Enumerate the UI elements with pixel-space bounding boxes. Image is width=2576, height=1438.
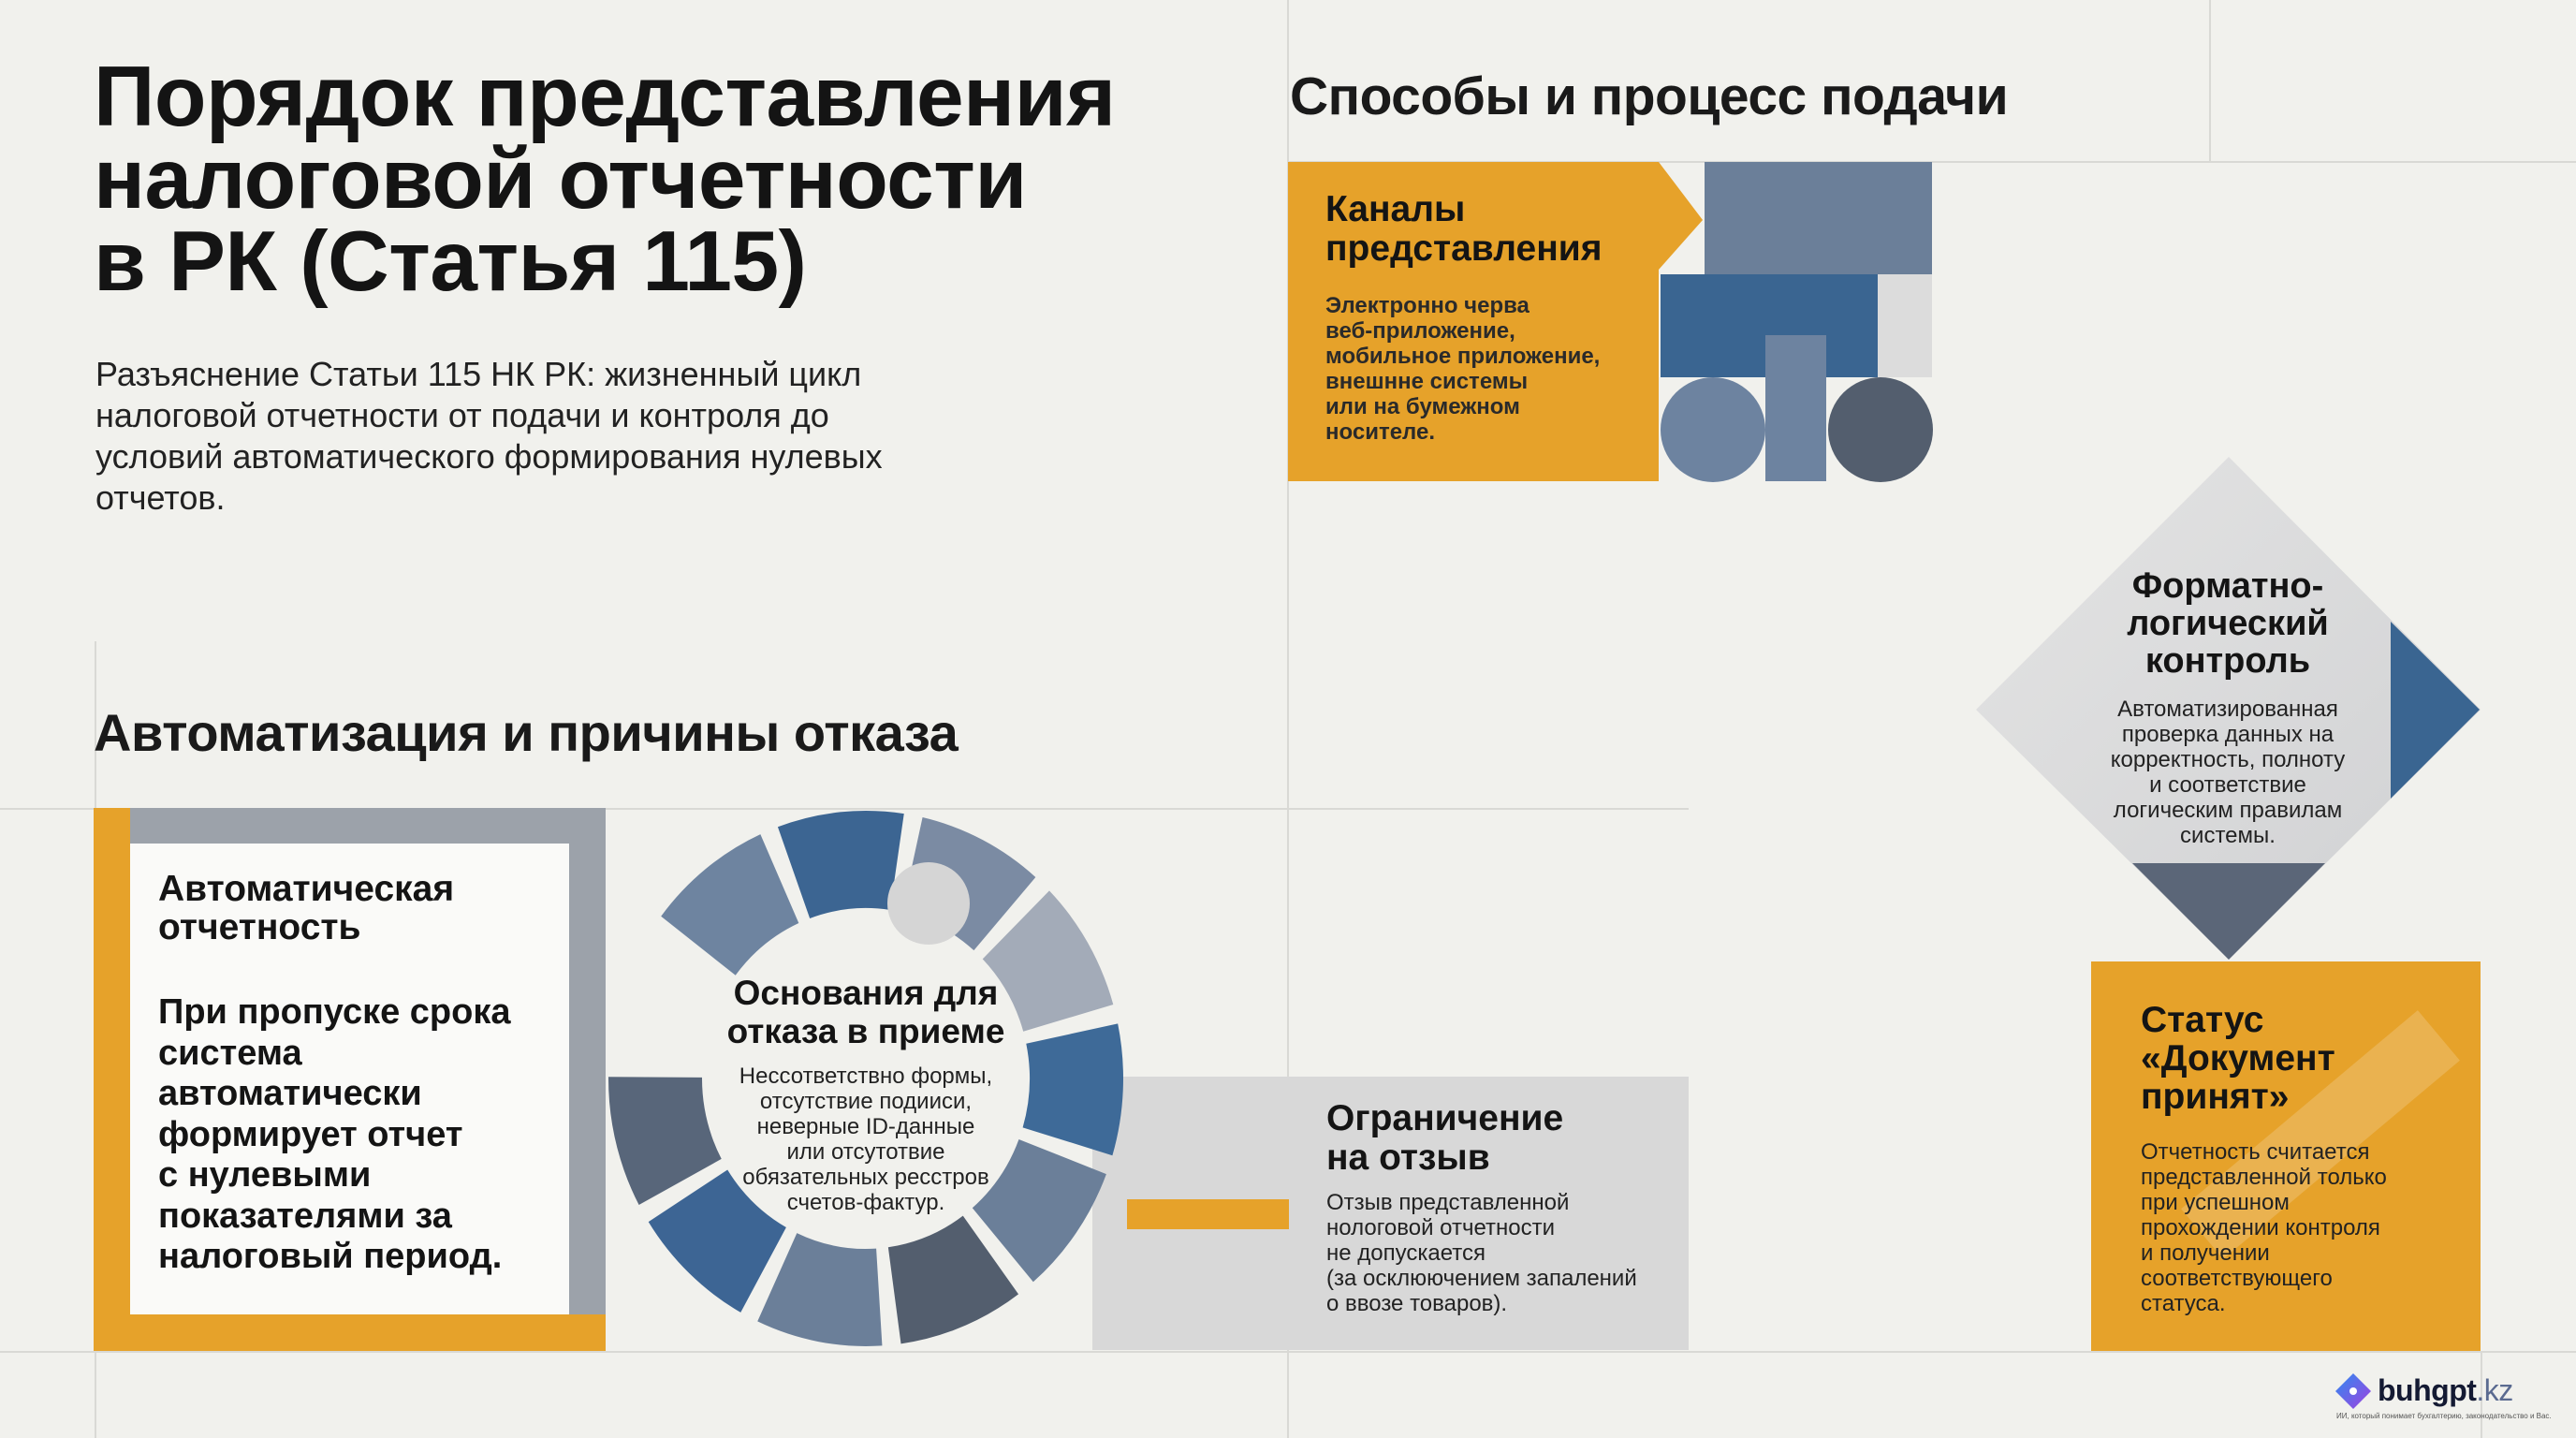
status text: статуса. [2141, 1291, 2226, 1316]
subtitle: условий автоматического формирования нулевых [95, 437, 883, 476]
auto text: автоматически [158, 1074, 422, 1113]
diamond text: Автоматизированная [2117, 697, 2338, 722]
panel: channels [1288, 162, 1933, 482]
title [94, 50, 1116, 309]
chart: rejection wheel [608, 811, 1123, 1346]
auto title [158, 869, 454, 947]
channels text: внешнне системы [1325, 369, 1528, 394]
logo: ИИ, который понимает бухгалтерию, законодательство и Вас. [2336, 1412, 2552, 1420]
auto title: отчетность [158, 907, 361, 947]
status title: принят» [2141, 1077, 2289, 1117]
wheel title: отказа в приеме [727, 1012, 1004, 1050]
auto text: с нулевыми [158, 1155, 371, 1195]
orange bar [1127, 1199, 1289, 1229]
icon: faint check [2181, 1010, 2460, 1259]
icon: logo diamond [2335, 1373, 2371, 1409]
diamond title: логический [2127, 604, 2329, 643]
title: налоговой отчетности [94, 132, 1027, 227]
status text [2141, 1139, 2387, 1316]
channels text: Электронно черва [1325, 293, 1530, 318]
channels text [1325, 293, 1600, 445]
channels text: носителе. [1325, 419, 1435, 445]
restriction text: Отзыв представленной [1326, 1190, 1569, 1215]
heading: automation: Автоматизация и причины отказа [94, 703, 958, 762]
panel: withdrawal restriction [1092, 1077, 1689, 1350]
wheel text: или отсутотвие [786, 1139, 945, 1165]
diamond title: Форматно- [2132, 566, 2323, 606]
restriction text: о ввозе товаров). [1326, 1291, 1507, 1316]
title: Порядок представления [94, 50, 1116, 144]
wheel title [727, 974, 1004, 1050]
status text: соответствующего [2141, 1266, 2333, 1291]
subtitle: Разъяснение Статьи 115 НК РК: жизненный цикл [95, 355, 861, 393]
subtitle: отчетов. [95, 478, 226, 517]
restriction title [1326, 1098, 1563, 1178]
wheel text: Нессответствно формы, [739, 1064, 992, 1089]
restriction text [1326, 1190, 1637, 1316]
panel: automatic reporting [94, 808, 606, 1351]
wheel text [739, 1064, 992, 1215]
status title: Статус [2141, 1000, 2263, 1040]
auto text: система [158, 1034, 302, 1073]
auto text: показателями за [158, 1196, 452, 1236]
restriction title: Ограничение [1326, 1098, 1563, 1138]
panel: format-logical control diamond [1976, 457, 2481, 960]
diamond text: проверка данных на [2122, 722, 2334, 747]
auto text: налоговый период. [158, 1237, 502, 1276]
diamond text [2111, 697, 2346, 848]
auto text: При пропуске срока [158, 992, 511, 1032]
status text: прохождении контроля [2141, 1215, 2380, 1240]
channels text: мобильное приложение, [1325, 344, 1600, 369]
channels title [1325, 189, 1603, 269]
channels title: Каналы [1325, 189, 1465, 229]
auto text: формирует отчет [158, 1114, 462, 1153]
restriction text: нологовой отчетности [1326, 1215, 1555, 1240]
restriction text: не допускается [1326, 1240, 1486, 1266]
channels text: или на бумежном [1325, 394, 1520, 419]
diamond text: логическим правилам [2114, 798, 2342, 823]
title: в РК (Статья 115) [94, 214, 806, 309]
status title [2141, 1000, 2335, 1117]
subtitle [95, 355, 883, 517]
diamond text: и соответствие [2149, 772, 2306, 798]
diamond title: контроль [2145, 641, 2310, 681]
restriction title: на отзыв [1326, 1137, 1490, 1178]
diamond title [2127, 566, 2329, 681]
logo text: buhgpt.kz [2378, 1373, 2513, 1407]
diamond text: корректность, полноту [2111, 747, 2345, 772]
wheel title: Основания для [734, 974, 998, 1012]
status text: и получении [2141, 1240, 2270, 1266]
wheel text: обязательных ресстров [742, 1165, 989, 1190]
status title: «Документ [2141, 1038, 2335, 1078]
restriction text: (за осклюючением запалений [1326, 1266, 1637, 1291]
auto title: Автоматическая [158, 869, 454, 909]
subtitle: налоговой отчетности от подачи и контроля до [95, 396, 829, 434]
status text: представленной только [2141, 1165, 2387, 1190]
wheel text: счетов-фактур. [787, 1190, 944, 1215]
status text: Отчетность считается [2141, 1139, 2369, 1165]
wheel text: отсутствие подииси, [760, 1089, 972, 1114]
panel: status accepted [2091, 961, 2481, 1351]
auto text [158, 992, 511, 1276]
diamond text: системы. [2180, 823, 2276, 848]
channels text: веб-приложение, [1325, 318, 1515, 344]
logo [2335, 1373, 2552, 1420]
channels title: представления [1325, 228, 1603, 269]
wheel text: неверные ID-данные [757, 1114, 974, 1139]
status text: при успешном [2141, 1190, 2290, 1215]
heading: submission methods: Способы и процесс подачи [1290, 66, 2008, 126]
